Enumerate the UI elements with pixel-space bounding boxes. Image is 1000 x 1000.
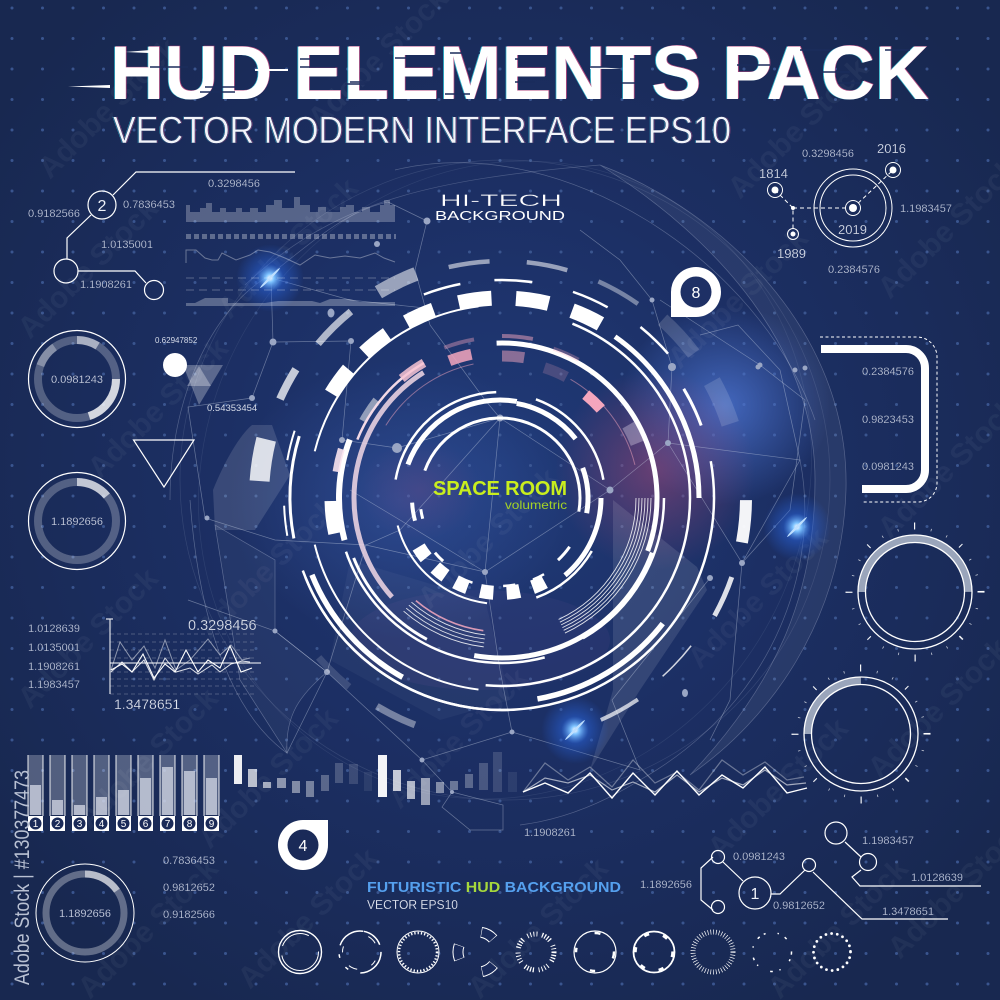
bracket panel	[820, 337, 937, 502]
donut 1.1892656 bottom	[36, 864, 134, 962]
watermark: Adobe Stock	[82, 332, 235, 485]
vertical stock caption: Adobe Stock | #130377473	[11, 770, 34, 985]
bottom number list: 0.9182566	[163, 909, 215, 921]
title: HUD ELEMENTS PACK	[111, 31, 930, 116]
donut 1.1892656 left	[28, 472, 126, 570]
watermark: Adobe Stock	[192, 492, 345, 645]
donut 0.0981243	[27, 329, 127, 429]
numbered bar gauges: 4	[99, 819, 105, 830]
numbered bar gauges: 8	[187, 819, 193, 830]
node widget 1: 0.0981243	[733, 851, 785, 863]
title: HUD ELEMENTS PACK	[110, 31, 929, 116]
watermark: Adobe Stock	[412, 462, 565, 615]
drop icon 4: 4	[299, 838, 308, 855]
bracket panel: 0.9823453	[862, 414, 914, 426]
drop icon 8	[671, 267, 721, 317]
ring: inner arcs	[355, 353, 645, 643]
node widget 2: 0.7836453	[123, 199, 175, 211]
data strips chart	[186, 197, 396, 306]
watermark: Adobe Stock	[72, 682, 225, 835]
timeline orbit widget: 1.1983457	[900, 203, 952, 215]
node widget 1: 0.9812652	[773, 900, 825, 912]
node widget 1	[640, 822, 981, 919]
timeline orbit widget: 2019	[838, 222, 867, 237]
node widget 1: 1.3478651	[882, 906, 934, 918]
numbered bar gauges: 9	[209, 819, 215, 830]
watermark: Adobe Stock	[382, 662, 535, 815]
line chart left: 0.3298456	[188, 618, 257, 634]
watermark: Adobe Stock	[682, 522, 835, 675]
subtitle: VECTOR MODERN INTERFACE EPS10	[113, 110, 731, 152]
gauge ring right bottom	[769, 642, 953, 826]
candle bars	[234, 752, 517, 805]
timeline orbit widget: 1989	[777, 246, 806, 261]
footer caption: FUTURISTIC HUD BACKGROUND	[367, 879, 621, 896]
node widget 1: 1.1892656	[640, 879, 692, 891]
small ring icons	[278, 926, 850, 978]
bracket panel: 0.2384576	[862, 366, 914, 378]
bottom number list: 0.7836453	[163, 855, 215, 867]
watermark: Adobe Stock	[32, 32, 185, 185]
ring icon 5	[518, 934, 554, 970]
line chart left: 1.3478651	[114, 696, 180, 712]
triangles with ball: 0.54353454	[207, 403, 257, 414]
node widget 1: 1	[751, 886, 760, 903]
watermark: Adobe Stock	[662, 222, 815, 375]
numbered bar gauges: 7	[165, 819, 171, 830]
timeline orbit widget: 1814	[759, 166, 788, 181]
main circular HUD	[160, 156, 844, 840]
ring icon 1	[278, 930, 322, 974]
ring icon 3	[397, 931, 439, 973]
numbered bar gauges	[28, 755, 219, 831]
ring: outer dashes	[160, 156, 844, 840]
node widget 2	[28, 172, 295, 300]
donut 1.1892656 left: 1.1892656	[51, 516, 103, 528]
ring icon 10	[814, 934, 850, 970]
bracket panel: 0.0981243	[862, 461, 914, 473]
node widget 2: 1.0135001	[101, 239, 153, 251]
footer caption: VECTOR EPS10	[367, 897, 458, 912]
numbered bar gauges: 1	[33, 819, 39, 830]
watermark: Adobe Stock	[702, 712, 855, 865]
title: HUD ELEMENTS PACK	[109, 31, 928, 116]
center title: SPACE ROOM	[433, 478, 567, 500]
line chart left: 1.0135001	[28, 642, 80, 654]
donut 0.0981243: 0.0981243	[51, 374, 103, 386]
node widget 2: 2	[98, 198, 107, 215]
line chart left	[28, 618, 261, 712]
watermark: Adobe Stock	[212, 172, 365, 325]
ring icon 6	[574, 931, 616, 973]
ring: white blocks	[219, 215, 785, 781]
bottom number list	[163, 855, 215, 921]
hi-tech label	[435, 191, 565, 223]
triangles with ball: 0.62947852	[155, 336, 198, 345]
center title	[433, 478, 567, 512]
ring icon 4	[452, 926, 504, 978]
numbered bar gauges: 2	[55, 819, 61, 830]
label: 1.1908261	[524, 827, 576, 839]
watermark: Adobe Stock	[12, 192, 165, 345]
footer caption	[367, 879, 621, 912]
watermark: Adobe Stock	[12, 562, 165, 715]
watermark: Adobe Stock	[232, 842, 385, 995]
timeline orbit widget	[759, 141, 952, 276]
zigzag chart	[523, 760, 807, 798]
donut 1.1892656 bottom: 1.1892656	[59, 908, 111, 920]
bottom number list: 0.9812652	[163, 882, 215, 894]
subtitle: VECTOR MODERN INTERFACE EPS10	[112, 110, 730, 152]
node widget 1: 1.1983457	[862, 835, 914, 847]
drop icon 8: 8	[692, 285, 701, 302]
gauge ring right top	[823, 500, 1000, 684]
ring: thin arcs and thick bands	[193, 189, 811, 807]
light flares	[236, 244, 831, 764]
drop icon 4	[278, 820, 328, 870]
numbered bar gauges: 6	[143, 819, 149, 830]
hi-tech label: HI-TECH	[440, 191, 562, 210]
line chart left: 1.0128639	[28, 623, 80, 635]
node widget 2: 0.3298456	[208, 178, 260, 190]
center title: volumetric	[505, 498, 567, 512]
subtitle: VECTOR MODERN INTERFACE EPS10	[114, 110, 732, 152]
node widget 2: 0.9182566	[28, 208, 80, 220]
ring icon 2	[336, 928, 384, 976]
line chart left: 1.1908261	[28, 661, 80, 673]
watermark: Adobe Stock	[192, 702, 345, 855]
timeline orbit widget: 2016	[877, 141, 906, 156]
watermark: Adobe Stock	[722, 52, 875, 205]
wireframe globe	[83, 49, 927, 911]
timeline orbit widget: 0.2384576	[828, 264, 880, 276]
hi-tech label: BACKGROUND	[435, 209, 565, 223]
timeline orbit widget: 0.3298456	[802, 148, 854, 160]
line chart left: 1.1983457	[28, 679, 80, 691]
ring icon 8	[693, 932, 733, 972]
ring icon 9	[752, 932, 792, 972]
numbered bar gauges: 3	[77, 819, 83, 830]
ring: fine line bundle	[335, 331, 669, 665]
node widget 2: 1.1908261	[80, 279, 132, 291]
ring: pink segments	[282, 278, 722, 718]
triangles with ball	[134, 336, 257, 487]
numbered bar gauges: 5	[121, 819, 127, 830]
ring icon 7	[634, 932, 674, 972]
node widget 1: 1.0128639	[911, 872, 963, 884]
